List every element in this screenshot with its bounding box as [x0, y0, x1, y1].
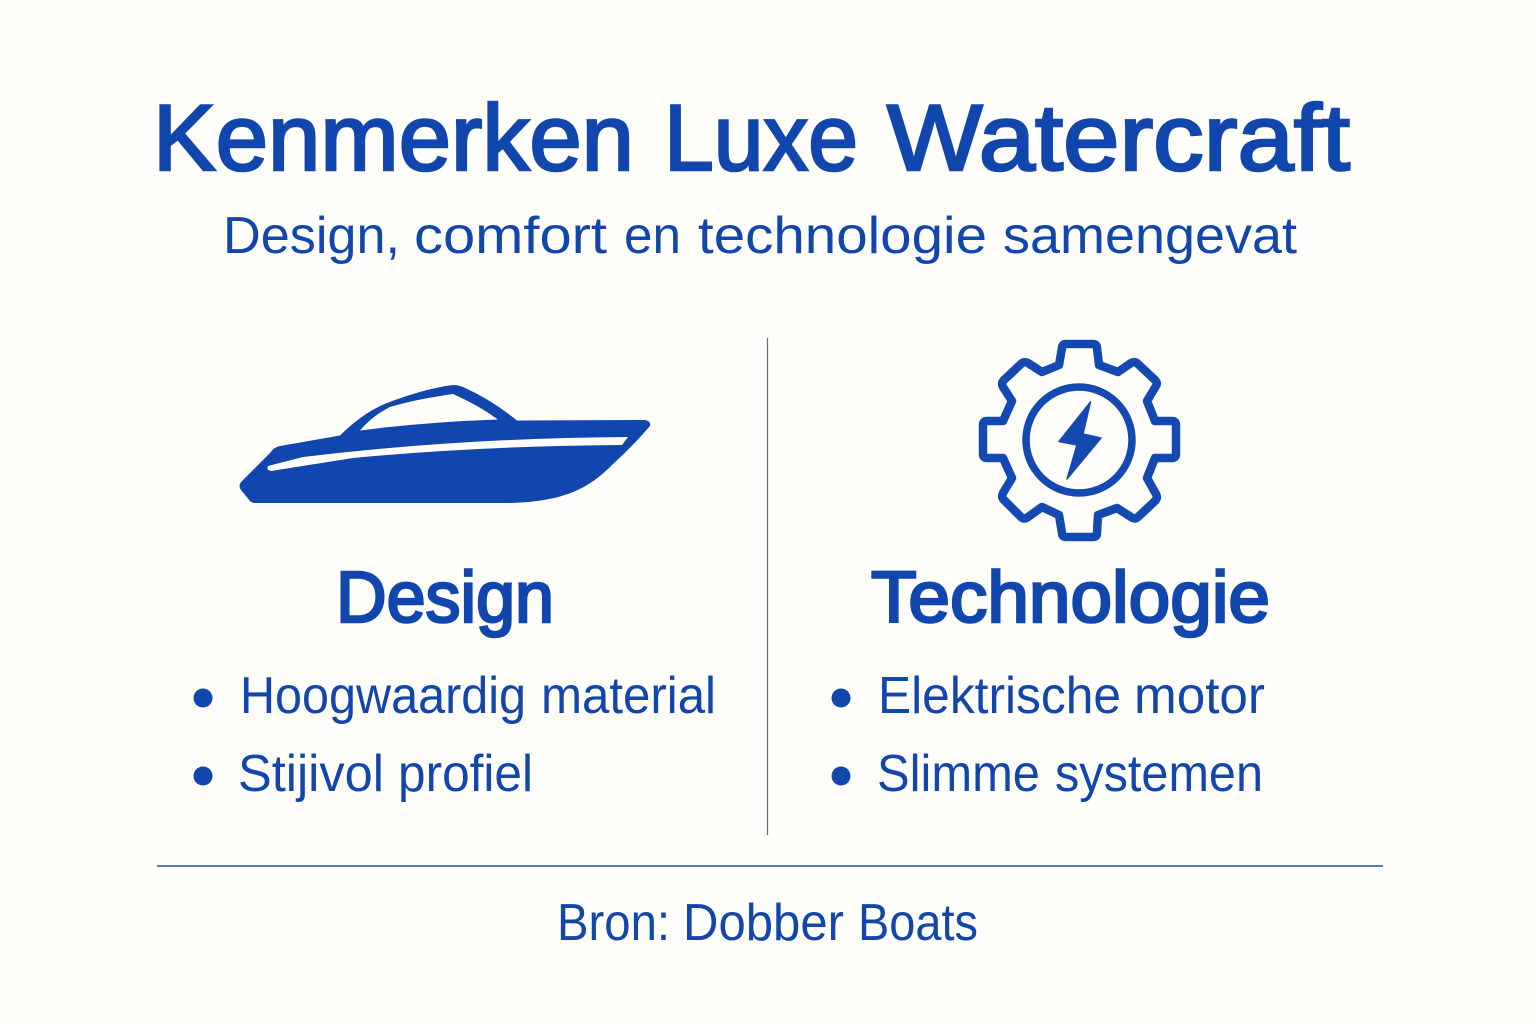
list: design: [194, 667, 716, 803]
source line: Bron:: [557, 894, 670, 952]
list: technologie: systemen: [1055, 745, 1263, 803]
heading: Design: Design: [336, 558, 554, 638]
vertical divider: [766, 338, 768, 835]
source line: Boats: [858, 894, 978, 952]
icon: boat: [240, 385, 650, 503]
subtitle: en: [624, 207, 681, 265]
list: technologie: Elektrische: [878, 667, 1121, 725]
list: design: Hoogwaardig: [240, 667, 526, 725]
source line: [557, 894, 978, 952]
title: Watercraft: [887, 85, 1350, 190]
title: Kenmerken: [153, 85, 634, 190]
title: Luxe: [664, 85, 858, 190]
list: design: profiel: [398, 745, 533, 803]
list: technologie: Slimme: [877, 745, 1040, 803]
subtitle: [223, 207, 1298, 265]
icon: gear with lightning bolt: [983, 344, 1176, 537]
subtitle: Design,: [223, 207, 400, 265]
subtitle: technologie: [698, 207, 987, 265]
footer rule: [157, 865, 1383, 867]
subtitle: samengevat: [1003, 207, 1298, 265]
heading: Technologie: Technologie: [871, 558, 1270, 638]
list: design: material: [541, 667, 716, 725]
source line: Dobber: [683, 894, 844, 952]
list: technologie: motor: [1134, 667, 1265, 725]
title: [153, 85, 1350, 190]
subtitle: comfort: [414, 207, 608, 265]
list: technologie: [832, 667, 1265, 803]
list: design: Stijivol: [238, 745, 384, 803]
